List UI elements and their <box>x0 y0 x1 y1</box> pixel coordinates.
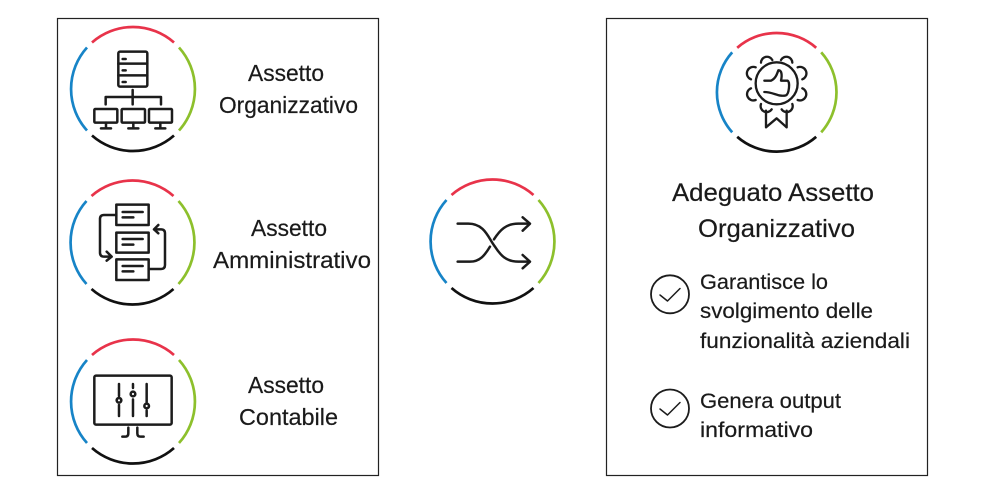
bullet: output informativo: informativo <box>700 418 813 442</box>
label: Assetto Organizzativo: Organizzativo <box>219 92 358 118</box>
label: Assetto Contabile <box>239 372 338 430</box>
heading: Adeguato Assetto Organizzativo: Organizzativo <box>698 215 855 243</box>
panel: assetti <box>58 18 378 476</box>
bullet: output informativo <box>651 389 841 442</box>
bullet: funzionalità aziendali <box>651 270 910 353</box>
bullet: output informativo: Genera output <box>700 389 841 413</box>
label: Assetto Amministrativo <box>213 215 371 273</box>
label: Assetto Contabile: Contabile <box>239 404 338 430</box>
panel: adeguato assetto <box>606 18 928 476</box>
heading: Adeguato Assetto Organizzativo <box>672 179 874 243</box>
bullet: funzionalità aziendali: svolgimento delle <box>700 299 873 323</box>
heading: Adeguato Assetto Organizzativo: Adeguato Assetto <box>672 179 874 207</box>
bullet: funzionalità aziendali: funzionalità aziendali <box>700 329 910 353</box>
label: Assetto Contabile: Assetto <box>248 372 324 398</box>
icon: shuffle ring <box>431 180 554 303</box>
icon: administrative ring <box>71 181 194 304</box>
icon: accounting ring <box>71 340 195 463</box>
icon: organizational ring <box>71 27 195 151</box>
icon: medal ring <box>717 33 836 152</box>
label: Assetto Amministrativo: Amministrativo <box>213 247 371 273</box>
label: Assetto Organizzativo: Assetto <box>248 60 324 86</box>
bullet: funzionalità aziendali: Garantisce lo <box>700 270 828 294</box>
label: Assetto Organizzativo <box>219 60 358 118</box>
label: Assetto Amministrativo: Assetto <box>251 215 327 241</box>
